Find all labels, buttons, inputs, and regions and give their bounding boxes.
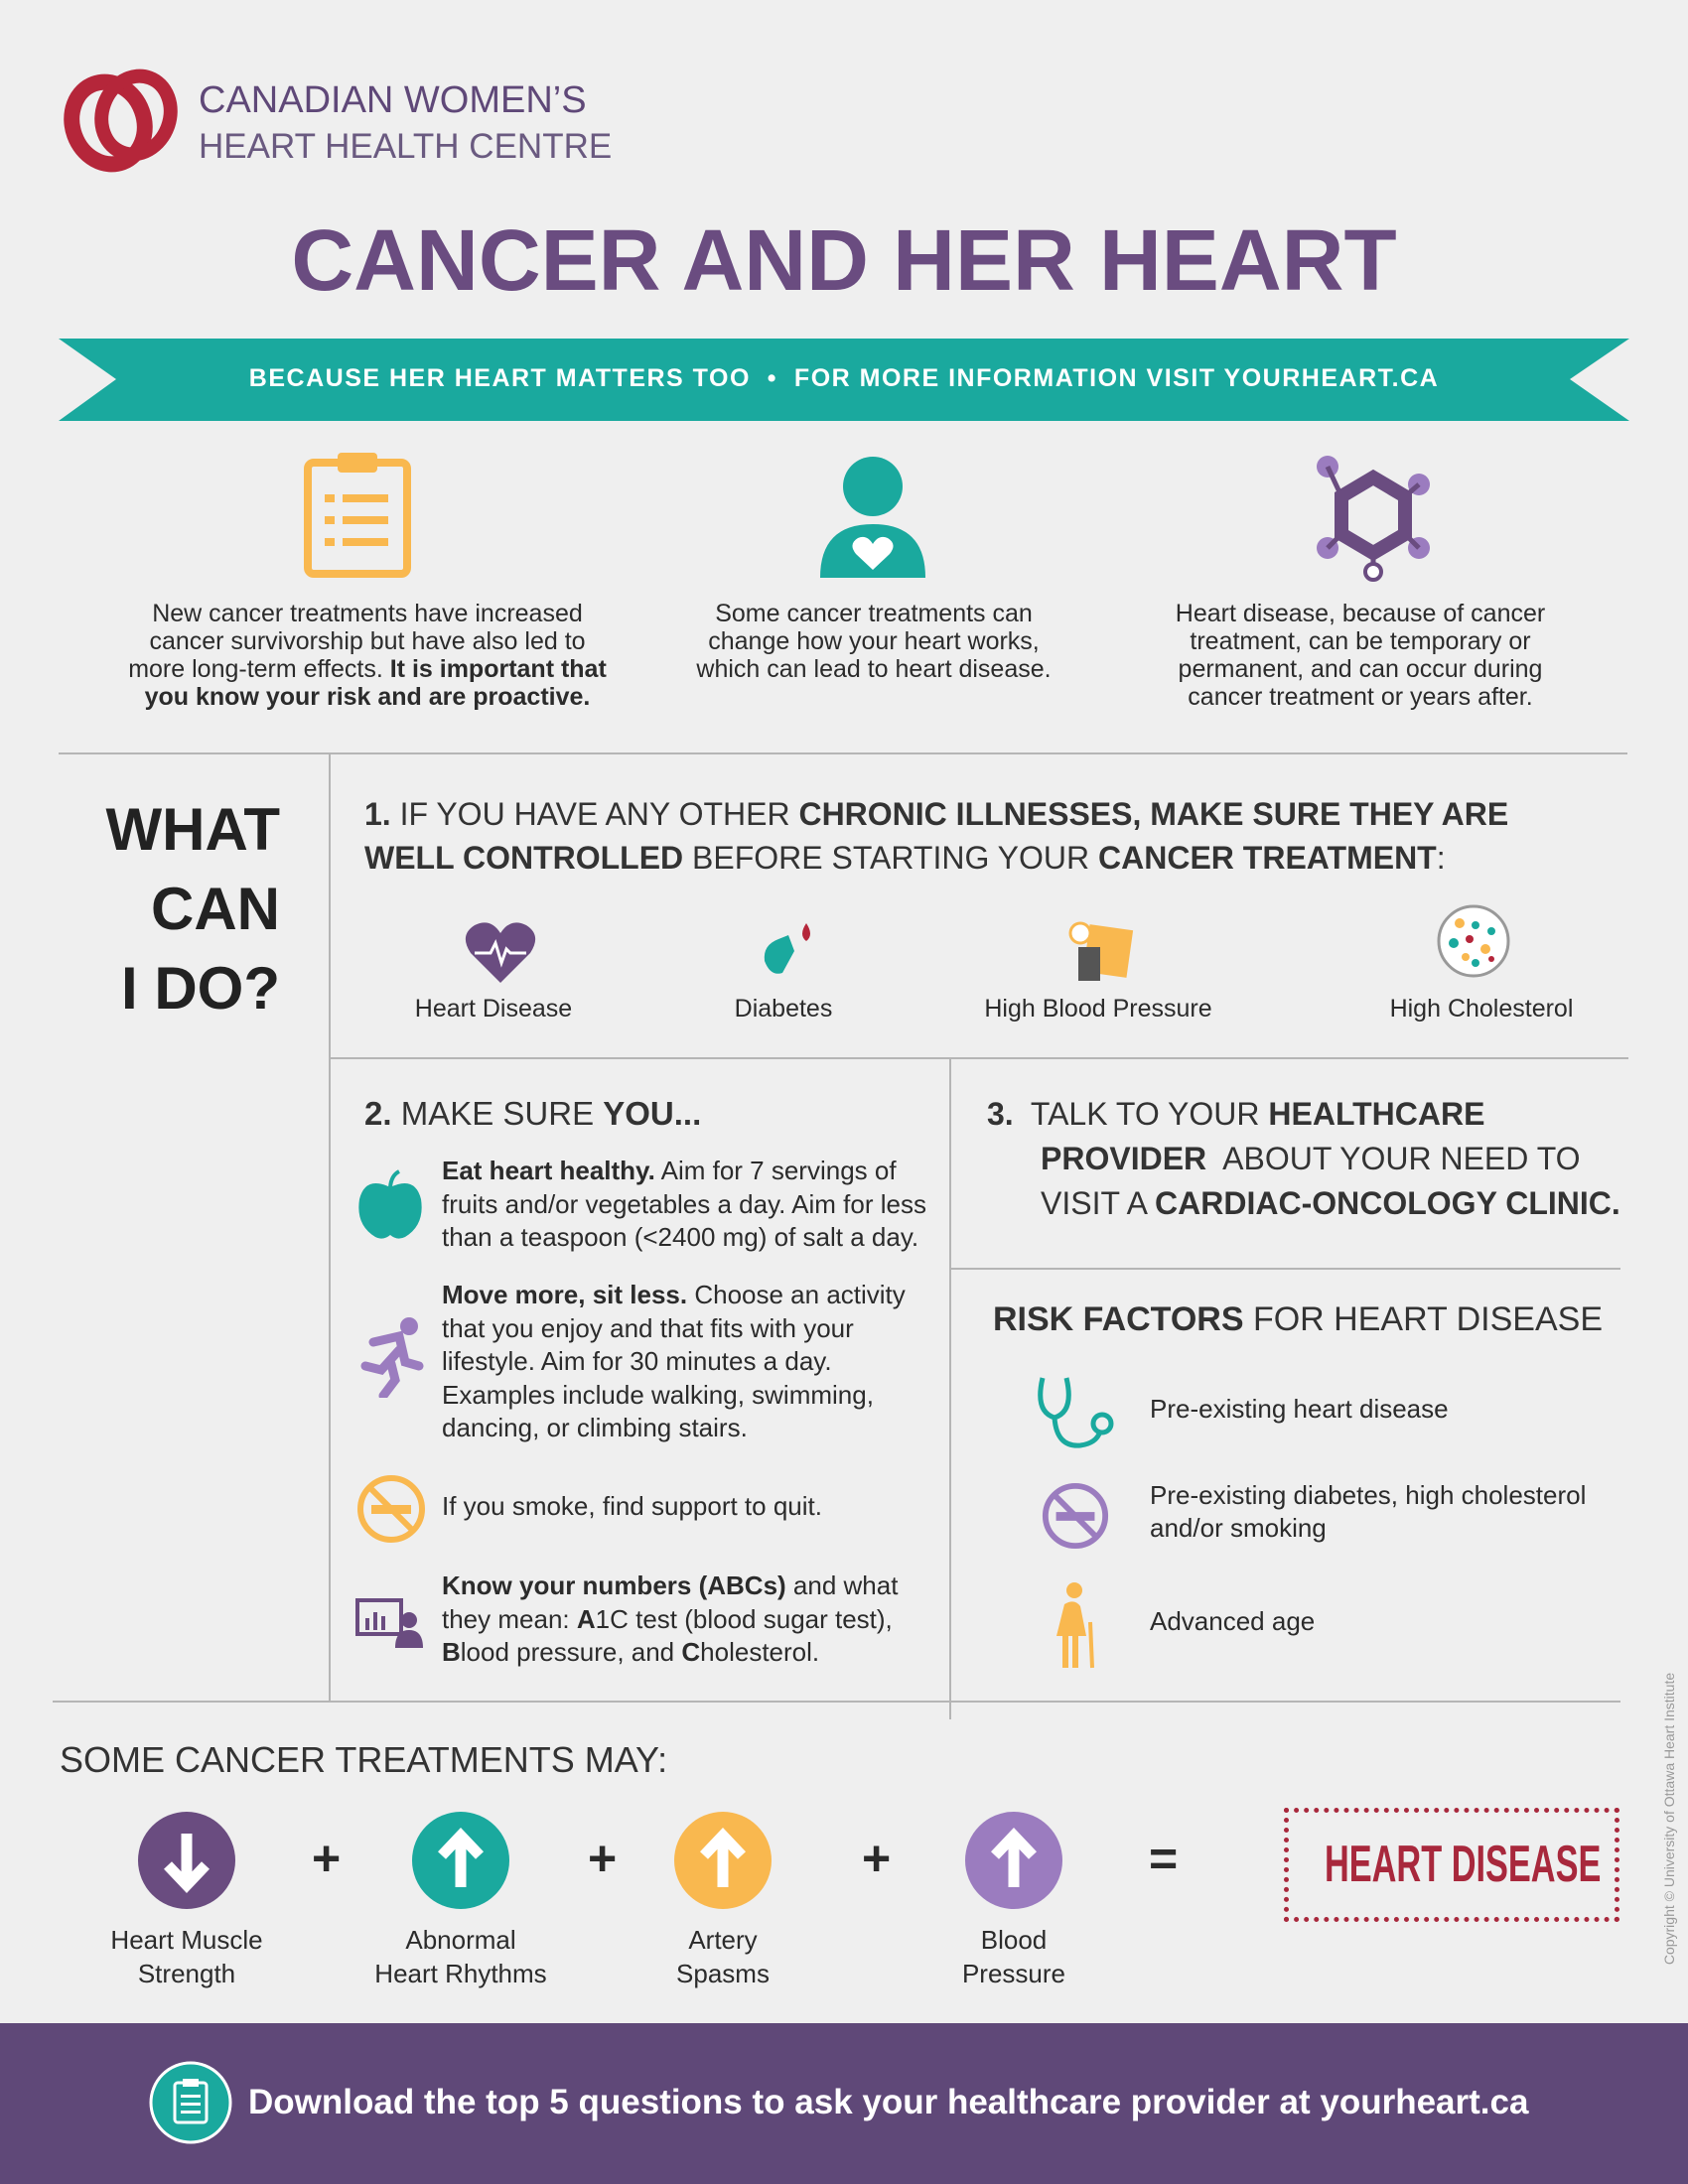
section 1 heading: 1. IF YOU HAVE ANY OTHER CHRONIC ILLNESSES, MAKE SURE THEY ARE: [364, 796, 1508, 832]
equation: Heart Muscle: [110, 1925, 263, 1955]
logo text: CANADIAN WOMEN’S: [199, 79, 587, 121]
icon: clipboard circle: [149, 2061, 232, 2144]
text: intro 2: change how your heart works,: [708, 627, 1040, 655]
footer: [0, 2023, 1688, 2184]
risk factors: Advanced age: [1150, 1606, 1315, 1636]
icon: elderly: [1056, 1582, 1094, 1668]
text: intro 1: [128, 600, 607, 711]
equation: Strength: [138, 1959, 235, 1988]
section 3: PROVIDER ABOUT YOUR NEED TO: [1041, 1141, 1581, 1176]
icon labels: [415, 995, 1573, 1023]
icon: person heart: [820, 457, 925, 578]
text: intro 3: Heart disease, because of cancer: [1176, 600, 1545, 627]
text: intro 3: [1176, 600, 1545, 711]
text: intro 1: New cancer treatments have increased: [152, 600, 583, 627]
equation: +: [312, 1831, 341, 1886]
heading: what can I do: WHAT: [105, 796, 280, 863]
logo text: HEART HEALTH CENTRE: [199, 127, 612, 166]
banner: [59, 339, 1629, 421]
equation: Pressure: [962, 1959, 1065, 1988]
section 3: 3. TALK TO YOUR HEALTHCARE: [987, 1096, 1484, 1132]
equation: +: [588, 1831, 617, 1886]
callout: heart disease: [1284, 1808, 1619, 1922]
equation: Heart Rhythms: [374, 1959, 547, 1988]
section 2 heading: 2. MAKE SURE YOU...: [364, 1095, 701, 1132]
icon: logo rings: [64, 69, 178, 173]
section 1 heading: WELL CONTROLLED BEFORE STARTING YOUR CANCER TREATMENT:: [364, 840, 1446, 876]
text: move more: Move more, sit less. Choose an activity that you enjoy and that fits with your lifestyle. Aim for 30 minutes a day. Examples include walking, swimming, dancing, or climbing stairs.: [442, 1280, 906, 1442]
heading: some cancer treatments: SOME CANCER TREATMENTS MAY:: [60, 1739, 667, 1780]
footer text: Download the top 5 questions to ask your healthcare provider at yourheart.ca: [248, 2083, 1528, 2121]
icon: molecule: [1317, 456, 1430, 582]
text: intro 2: [696, 600, 1052, 683]
text: intro 1: cancer survivorship but have also led to: [149, 627, 586, 655]
icon labels: High Cholesterol: [1390, 995, 1573, 1023]
callout: heart disease: HEART DISEASE: [1325, 1836, 1601, 1893]
icon: numbers: [355, 1598, 423, 1648]
equation: [110, 1808, 1619, 1988]
section 1: [364, 796, 1508, 876]
text: intro 2: which can lead to heart disease.: [696, 655, 1052, 683]
section 1 heading: [364, 796, 1508, 876]
text: intro 1: you know your risk and are proactive.: [145, 683, 590, 711]
text: intro 1: more long-term effects. It is important that: [128, 655, 607, 683]
text: eat heart healthy: Eat heart healthy. Aim for 7 servings of fruits and/or vegetables a day. Aim for less than a teaspoon (<2400 mg) of salt a day.: [442, 1156, 926, 1252]
equation: Spasms: [676, 1959, 770, 1988]
risk factors: Pre-existing heart disease: [1150, 1394, 1449, 1424]
risk heading: RISK FACTORS FOR HEART DISEASE: [993, 1300, 1603, 1338]
heading: what can I do: CAN: [151, 876, 280, 942]
banner: BECAUSE HER HEART MATTERS TOO • FOR MORE INFORMATION VISIT YOURHEART.CA: [249, 364, 1439, 392]
icon: no smoking purple: [1043, 1483, 1108, 1549]
icon: high cholesterol: [1438, 905, 1509, 977]
equation: Artery: [688, 1925, 758, 1955]
title: CANCER AND HER HEART: [291, 212, 1397, 309]
logo: [64, 69, 612, 173]
risk factors: Pre-existing diabetes, high cholesterol: [1150, 1480, 1586, 1510]
icon labels: Diabetes: [735, 995, 832, 1023]
icon: clipboard: [304, 453, 411, 578]
equation: Abnormal: [405, 1925, 516, 1955]
equation: Blood: [981, 1925, 1047, 1955]
icon: stethoscope: [1038, 1377, 1114, 1448]
heading: what can I do: [105, 796, 280, 1022]
icon: diabetes: [765, 923, 810, 974]
icon: heart disease: [465, 922, 536, 983]
icon: up arrow teal: [412, 1812, 509, 1909]
equation: =: [1149, 1831, 1178, 1886]
text: know your numbers: Know your numbers (ABCs) and what they mean: A1C test (blood sugar test), Blood pressure, and Cholesterol.: [442, 1570, 898, 1667]
icon labels: Heart Disease: [415, 995, 572, 1023]
equation: +: [862, 1831, 891, 1886]
icon labels: High Blood Pressure: [984, 995, 1212, 1023]
text: intro 3: cancer treatment or years after.: [1188, 683, 1533, 711]
icon: up arrow orange: [674, 1812, 772, 1909]
text: smoke: If you smoke, find support to quit.: [442, 1491, 822, 1521]
icon: runner: [361, 1317, 423, 1398]
risk factors: [993, 1300, 1603, 1668]
icon: no smoking: [357, 1475, 425, 1543]
text: intro 3: permanent, and can occur during: [1179, 655, 1542, 683]
section 3: VISIT A CARDIAC-ONCOLOGY CLINIC.: [1041, 1185, 1620, 1221]
text: Copyright © University of Ottawa Heart Institute: [1661, 1673, 1677, 1965]
text: intro 2: Some cancer treatments can: [715, 600, 1033, 627]
icon: down arrow purple: [138, 1812, 235, 1909]
icon: apple: [358, 1169, 422, 1239]
logo text: [199, 79, 612, 166]
heading: what can I do: I DO?: [121, 955, 280, 1022]
icon: high blood pressure: [1068, 921, 1134, 981]
section 3: [987, 1096, 1620, 1221]
icon: up arrow light purple: [965, 1812, 1062, 1909]
risk factors: and/or smoking: [1150, 1513, 1327, 1543]
text: intro 3: treatment, can be temporary or: [1190, 627, 1531, 655]
